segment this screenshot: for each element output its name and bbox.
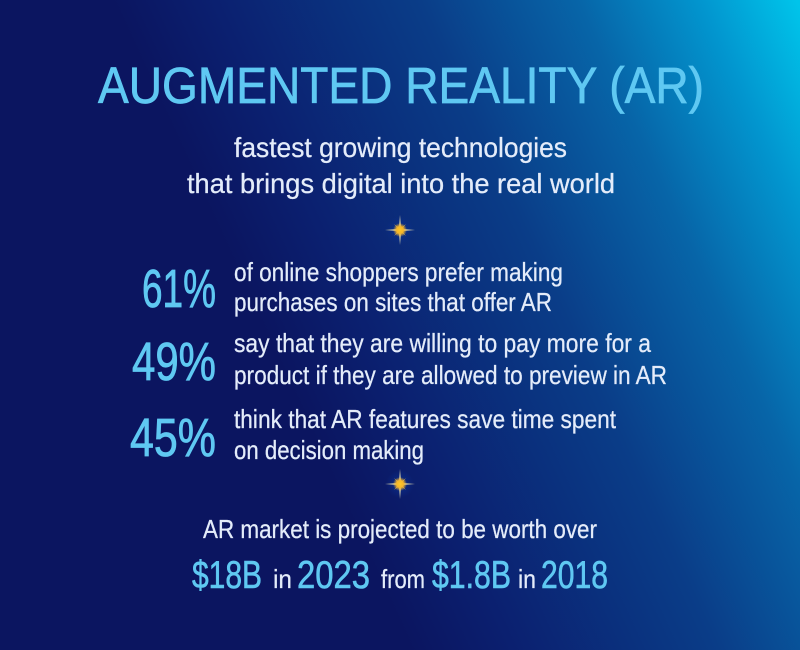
market figures: in — [273, 564, 292, 594]
market figures: 2023 — [297, 554, 370, 597]
stat: 45% — [130, 404, 617, 468]
subtitle: fastest growing technologies — [234, 132, 567, 163]
market projection text: AR market is projected to be worth over — [203, 514, 597, 544]
stat: 45%: 45% — [130, 408, 216, 468]
stat: 49% — [132, 328, 667, 392]
stat: 49%: 49% — [132, 332, 216, 392]
stat: 45%: think that AR features save time spent — [234, 404, 617, 434]
icon: bottom gold star — [385, 469, 415, 499]
subtitle: that brings digital into the real world — [187, 168, 615, 199]
title: AUGMENTED REALITY (AR) — [98, 57, 704, 114]
stat: 61%: 61% — [142, 259, 216, 319]
stat: 49%: product if they are allowed to preview in AR — [234, 360, 667, 390]
stat: 61%: purchases on sites that offer AR — [234, 287, 552, 317]
market figures — [192, 554, 608, 597]
icon: top gold star — [385, 215, 415, 245]
market figures: 2018 — [541, 554, 608, 597]
subtitle — [187, 132, 615, 199]
stat: 49%: say that they are willing to pay more for a — [234, 328, 651, 358]
stat: 61% — [142, 257, 563, 319]
stat: 45%: on decision making — [234, 435, 424, 465]
market figures: $18B — [192, 554, 262, 597]
market figures: $1.8B — [432, 554, 511, 597]
market figures: in — [518, 564, 536, 594]
market figures: from — [381, 564, 425, 594]
stat: 61%: of online shoppers prefer making — [234, 257, 563, 287]
